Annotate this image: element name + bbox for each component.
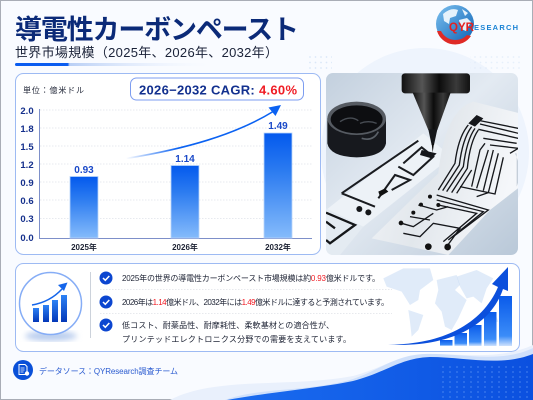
divider	[90, 272, 92, 338]
logo: QYResearch	[436, 5, 518, 44]
arrow: growth trend	[126, 105, 281, 158]
panel: key findings	[16, 264, 520, 352]
icon: data source	[13, 360, 33, 380]
y axis labels: 0.3	[20, 214, 34, 225]
bar 2026	[171, 154, 199, 252]
logo: QYResearch: ESEARCH	[474, 23, 518, 32]
film roll	[372, 102, 520, 255]
subtitle: 世界市場規模（2025年、2026年、2032年）	[15, 45, 278, 60]
bar 2025	[70, 165, 98, 252]
world map	[383, 268, 498, 337]
y axis labels: 0.0	[20, 233, 34, 244]
illustration: printing conductive paste on film	[320, 73, 520, 255]
title: 導電性カーボンペースト	[15, 15, 299, 45]
printed sheet on table	[326, 133, 452, 227]
grid lines and axes	[40, 110, 312, 218]
bar 2025: 2025年	[71, 242, 97, 252]
y axis labels: 2.0	[20, 106, 34, 117]
callout: CAGR	[130, 78, 304, 100]
printed traces	[402, 120, 518, 247]
panel: market size chart	[16, 74, 320, 254]
bullet 3: 低コスト、耐薬品性、耐摩耗性、柔軟基材との適合性が、	[122, 320, 334, 330]
y axis labels: 1.5	[20, 142, 34, 153]
y axis labels: 0.6	[20, 196, 34, 207]
bullet 2	[100, 296, 389, 308]
bottom wave	[170, 345, 533, 400]
bullet 1	[100, 272, 380, 284]
growth chart illustration	[388, 267, 512, 346]
bar 2032: 1.49	[268, 121, 288, 132]
bullet 3	[100, 318, 351, 344]
callout: CAGR: 2026−2032 CAGR: 4.60%	[139, 82, 297, 98]
background glow circle	[321, 48, 529, 256]
bullet 1: 2025年の世界の導電性カーボンペースト市場規模は約0.93億米ドルです。	[122, 273, 380, 283]
icon: growth chart circle	[20, 272, 82, 341]
bullet 2: 2026年は1.14億米ドル、2032年には1.49億米ドルに達すると予測されています。	[122, 297, 389, 307]
dot pattern decoration	[306, 53, 520, 71]
bar 2032: 2032年	[265, 242, 291, 252]
data source text: データソース：QYResearch調査チーム	[39, 366, 178, 376]
title underline	[15, 63, 210, 66]
bar 2026: 2026年	[172, 242, 198, 252]
ink jar	[327, 118, 386, 157]
y axis labels: 1.2	[20, 160, 34, 171]
bar 2026: 1.14	[175, 154, 195, 165]
logo: QYResearch: QYR	[449, 22, 475, 34]
dispensing nozzle	[402, 73, 470, 93]
y axis labels: 0.9	[20, 178, 34, 189]
unit label: 単位：億米ドル	[23, 85, 84, 95]
y axis labels	[20, 106, 34, 244]
bar 2025: 0.93	[74, 165, 94, 176]
bar 2032	[264, 121, 292, 252]
bullet 3: プリンテッドエレクトロニクス分野での需要を支えています。	[122, 334, 351, 344]
y axis labels: 1.8	[20, 124, 34, 135]
